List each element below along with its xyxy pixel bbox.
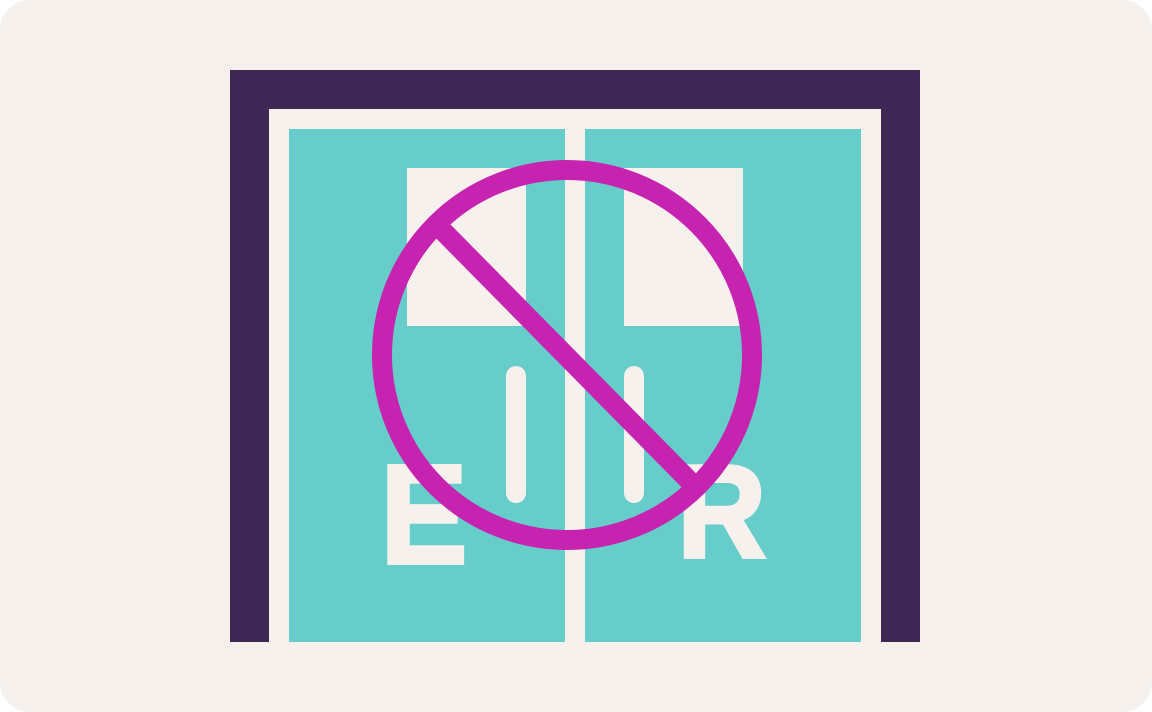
left door handle — [506, 366, 526, 503]
left door panel — [289, 129, 565, 642]
left door window — [407, 168, 526, 326]
prohibition slash — [436, 224, 698, 490]
right door panel — [585, 129, 861, 642]
left door — [289, 129, 565, 642]
door frame — [230, 70, 920, 642]
right door — [585, 129, 861, 642]
right door window — [624, 168, 743, 326]
right door handle — [624, 366, 644, 503]
prohibition ring — [382, 170, 752, 540]
letter E: E — [380, 435, 467, 593]
icon: prohibition sign — [382, 170, 752, 540]
letter R: R — [677, 439, 766, 586]
